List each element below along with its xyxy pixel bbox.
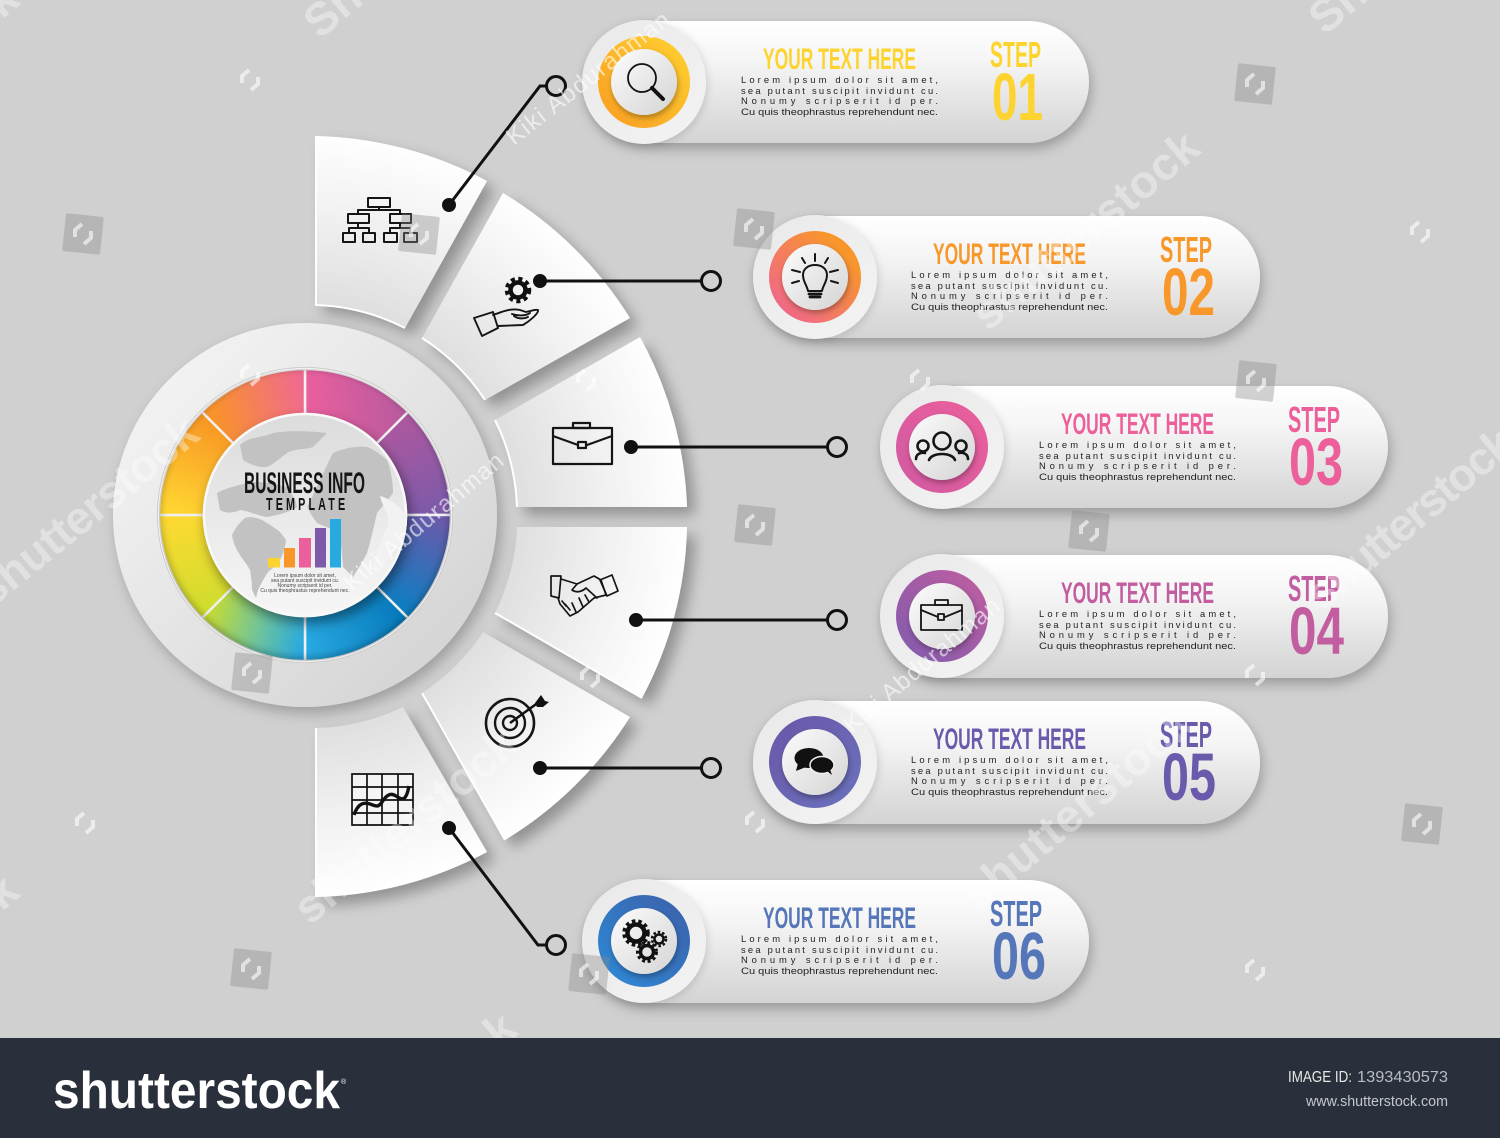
heading: YOUR TEXT HERE: [1061, 408, 1214, 441]
centre subtitle: TEMPLATE: [266, 495, 345, 515]
footer registered mark: ®: [341, 1078, 347, 1086]
footer bar: [0, 1038, 1500, 1138]
watermark overlay: k: [473, 1001, 526, 1058]
step label: STEP: [1288, 399, 1340, 440]
segment 5: [422, 632, 630, 840]
step label: STEP: [1160, 229, 1212, 270]
segment 3: [495, 337, 687, 507]
connector 4: [630, 610, 846, 630]
watermark overlay: shutterstock: [951, 696, 1203, 920]
step number: 03: [1289, 425, 1343, 500]
body text: sea putant suscipit invidunt cu.: [911, 280, 1108, 291]
icon: org chart: [343, 198, 417, 242]
body text: Lorem ipsum dolor sit amet,: [911, 269, 1108, 280]
body text: Lorem ipsum dolor sit amet,: [1039, 439, 1236, 450]
body text: sea putant suscipit invidunt cu.: [911, 765, 1108, 776]
footer image id: IMAGE ID:: [1288, 1069, 1352, 1086]
world map: [217, 431, 393, 598]
watermark overlay: shutterstock: [283, 717, 527, 934]
centre disc: [204, 414, 406, 616]
segment 1: [316, 136, 487, 328]
white headland on map: [374, 496, 406, 575]
icon: line chart on grid: [352, 774, 413, 825]
body text: [1039, 439, 1236, 482]
body text: sea putant suscipit invidunt cu.: [1039, 619, 1236, 630]
body text: Nonumy scripserit id per.: [741, 954, 938, 965]
body text: sea putant suscipit invidunt cu.: [741, 85, 938, 96]
segment 6: [316, 707, 487, 897]
body text: [911, 269, 1108, 312]
step 03 card: [880, 385, 1388, 509]
body text: Nonumy scripserit id per.: [911, 775, 1108, 786]
connector 2: [534, 272, 720, 290]
body text: Cu quis theophrastus reprehendunt nec.: [911, 786, 1108, 797]
step 01 card: [582, 20, 1089, 144]
centre body text: Cu quis theophrastus reprehendunt nec.: [260, 588, 350, 594]
step label: STEP: [1160, 714, 1212, 755]
body text: [911, 754, 1108, 797]
connector 1: [444, 76, 566, 210]
connector lines with end markers: [444, 76, 846, 954]
heading: YOUR TEXT HERE: [933, 723, 1086, 756]
step number: 02: [1162, 255, 1215, 330]
body text: Cu quis theophrastus reprehendunt nec.: [1039, 471, 1236, 482]
centre body text: [260, 573, 350, 594]
step label: STEP: [990, 893, 1042, 934]
body text: Cu quis theophrastus reprehendunt nec.: [1039, 640, 1236, 651]
body text: [1039, 608, 1236, 651]
footer image number: 1393430573: [1357, 1069, 1448, 1086]
watermark overlay: Kiki Abdurahman: [501, 6, 675, 151]
heading: YOUR TEXT HERE: [933, 238, 1086, 271]
centre body text: Lorem ipsum dolor sit amet,: [274, 573, 336, 579]
heading: YOUR TEXT HERE: [763, 43, 916, 76]
step number: 06: [992, 919, 1046, 994]
watermark overlay: Kiki Abdurahman: [339, 447, 509, 597]
step number: 05: [1162, 740, 1216, 815]
body text: Lorem ipsum dolor sit amet,: [1039, 608, 1236, 619]
icon: team of people: [916, 432, 968, 460]
centre title: BUSINESS INFO: [244, 467, 365, 500]
icon: gears: [624, 921, 666, 962]
heading: YOUR TEXT HERE: [763, 902, 916, 935]
step 04 card: [880, 554, 1388, 678]
body text: sea putant suscipit invidunt cu.: [741, 944, 938, 955]
centre body text: Nonumy scripserit id per.: [277, 583, 333, 589]
body text: Nonumy scripserit id per.: [1039, 460, 1236, 471]
icon: briefcase: [553, 423, 612, 464]
segment 4: [495, 527, 687, 698]
step number: 01: [992, 60, 1043, 135]
body text: Nonumy scripserit id per.: [911, 290, 1108, 301]
body text: Cu quis theophrastus reprehendunt nec.: [741, 965, 938, 976]
connector 5: [534, 758, 720, 778]
icon: briefcase: [921, 600, 962, 630]
centre bar chart: [268, 519, 341, 568]
body text: Lorem ipsum dolor sit amet,: [741, 74, 938, 85]
centre body text: sea putant suscipit invidunt cu.: [271, 578, 339, 584]
connector 6: [444, 822, 566, 954]
connector 3: [626, 438, 846, 456]
fan of six segments: [316, 136, 687, 897]
watermark overlay: Kiki Abdurahman: [839, 593, 1005, 739]
body text: [741, 74, 938, 117]
body text: Lorem ipsum dolor sit amet,: [741, 933, 938, 944]
body text: Nonumy scripserit id per.: [1039, 629, 1236, 640]
icon: speech bubbles: [794, 748, 834, 775]
step label: STEP: [1288, 568, 1340, 609]
outer bevel ring: [113, 323, 497, 707]
step 06 card: [582, 879, 1089, 1003]
colour ring: [159, 369, 451, 661]
watermark overlay: shutterstock: [961, 120, 1209, 340]
footer url: www.shutterstock.com: [1305, 1094, 1448, 1110]
icon: handshake: [551, 575, 618, 616]
icon: magnifier: [628, 64, 663, 99]
segment 2: [422, 193, 630, 400]
body text: Cu quis theophrastus reprehendunt nec.: [741, 106, 938, 117]
central colour wheel: [113, 323, 497, 707]
step number: 04: [1289, 594, 1344, 669]
body text: [741, 933, 938, 976]
step 05 card: [753, 700, 1260, 824]
body text: Cu quis theophrastus reprehendunt nec.: [911, 301, 1108, 312]
icon: light bulb: [792, 254, 838, 297]
footer logo: shutterstock: [53, 1062, 340, 1120]
step 02 card: [753, 215, 1260, 339]
step label: STEP: [990, 34, 1041, 75]
body text: Lorem ipsum dolor sit amet,: [911, 754, 1108, 765]
icon: hand with gear: [474, 279, 538, 336]
body text: Nonumy scripserit id per.: [741, 95, 938, 106]
icon: target with arrow: [486, 695, 549, 747]
heading: YOUR TEXT HERE: [1061, 577, 1214, 610]
body text: sea putant suscipit invidunt cu.: [1039, 450, 1236, 461]
